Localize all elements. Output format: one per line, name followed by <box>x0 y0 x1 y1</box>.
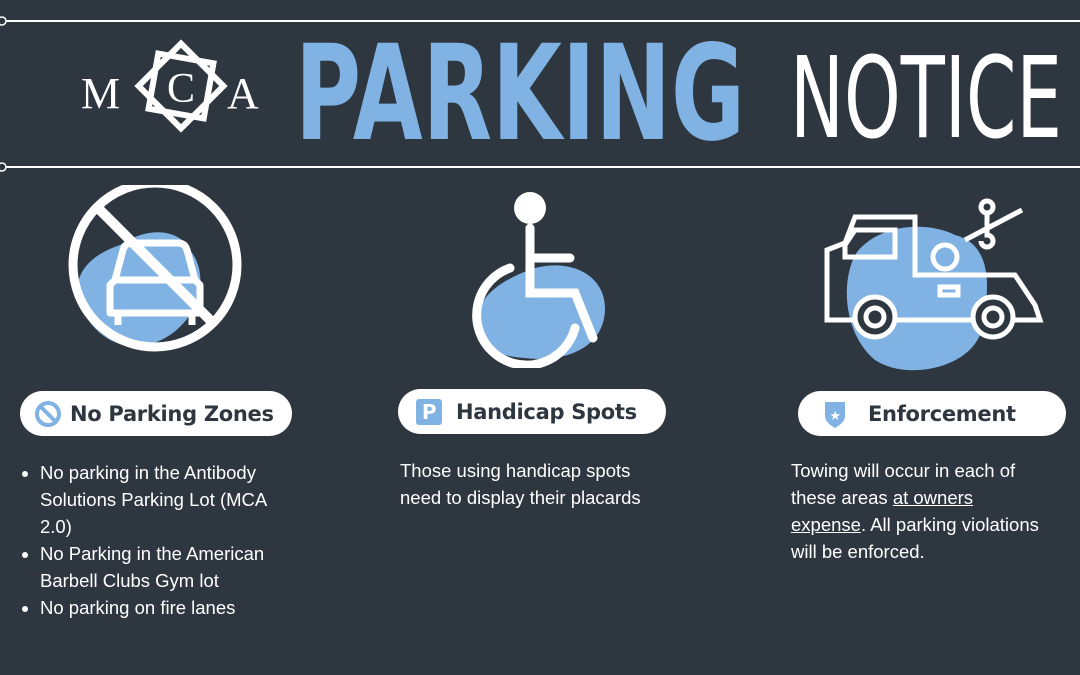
text: enforcement: Towing will occur in each of these areas at owners expense. All parking violations will be enforced. <box>791 460 1039 562</box>
logo: MCA <box>81 40 259 132</box>
pill: Enforcement <box>798 391 1066 436</box>
text: no parking list: No parking on fire lanes <box>40 597 235 618</box>
logo: MCA: C <box>167 66 195 112</box>
icon: no parking <box>68 185 242 352</box>
text: no parking list: No Parking in the American Barbell Clubs Gym lot <box>40 543 264 591</box>
pill: Enforcement: ★ <box>829 408 841 424</box>
icon: tow truck <box>824 198 1044 370</box>
pill: Handicap Spots: P <box>422 400 436 424</box>
pill: No Parking Zones: No Parking Zones <box>70 402 274 426</box>
header lines <box>0 16 1080 172</box>
pill: Handicap Spots: Handicap Spots <box>456 400 637 424</box>
title: PARKING <box>295 17 745 170</box>
pill: Enforcement: Enforcement <box>868 402 1016 426</box>
text: no parking list <box>22 462 268 618</box>
pill: Handicap Spots <box>398 389 666 434</box>
text: handicap: Those using handicap spots need to display their placards <box>400 460 641 508</box>
icon: wheelchair <box>472 192 605 368</box>
logo: MCA: M <box>81 69 120 118</box>
logo: MCA: A <box>227 69 259 118</box>
pill: No Parking Zones <box>20 391 292 436</box>
text: no parking list: No parking in the Antibody Solutions Parking Lot (MCA 2.0) <box>40 462 266 537</box>
